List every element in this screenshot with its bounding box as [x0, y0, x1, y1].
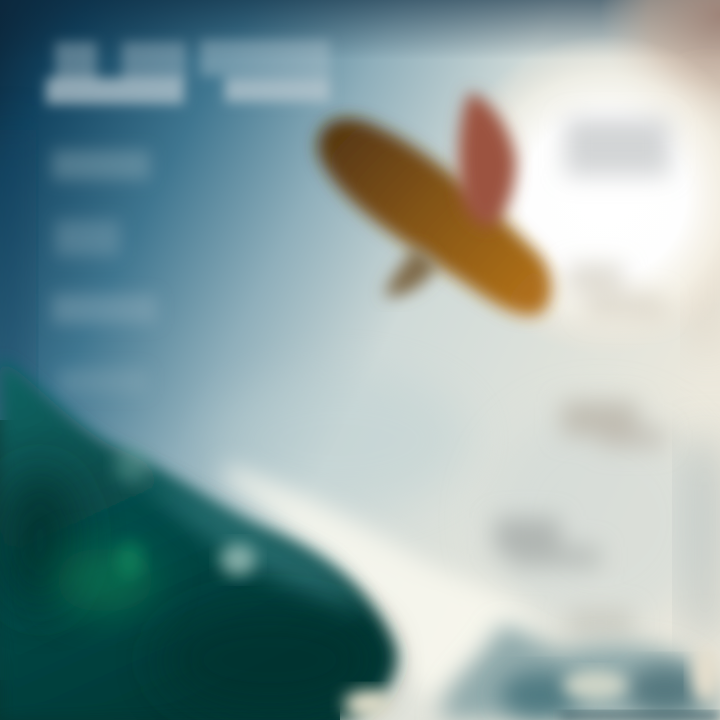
wave [0, 360, 396, 720]
foam highlight [225, 465, 540, 700]
wave light teal crest [130, 470, 365, 615]
green glow [53, 548, 157, 612]
left text blocks [52, 150, 157, 394]
surfboard [318, 92, 552, 315]
foam spots [220, 544, 256, 576]
wave shadow [0, 470, 80, 610]
surfboard fin [459, 92, 516, 228]
right text blocks [495, 118, 670, 636]
clouds at lower right [344, 625, 720, 720]
sun glow [445, 0, 720, 355]
title [46, 40, 330, 104]
